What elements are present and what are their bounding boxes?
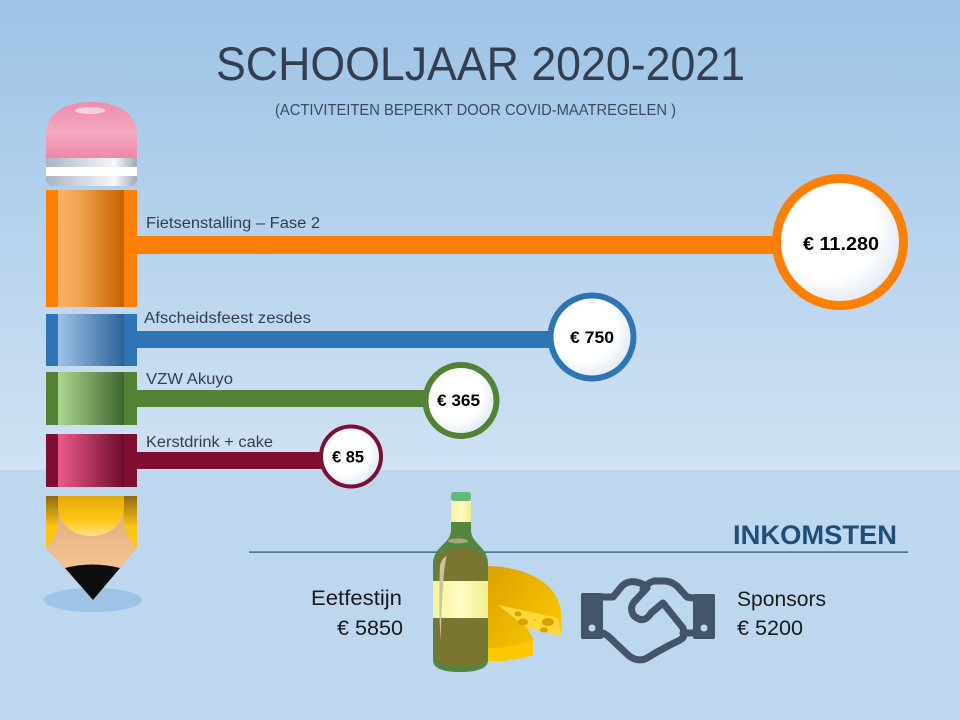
maroon bar: Kerstdrink xyxy=(137,426,381,486)
income divider xyxy=(249,552,908,553)
orange bar: Fietsenstalling xyxy=(137,178,904,306)
green segment xyxy=(46,372,137,425)
icon: handshake xyxy=(581,581,715,660)
blue bar: Afscheidsfeest: € 750 xyxy=(570,329,614,347)
blue bar: Afscheidsfeest xyxy=(137,296,634,378)
hands xyxy=(603,581,693,660)
left cuff xyxy=(581,593,603,639)
orange bar: Fietsenstalling: Fietsenstalling – Fase 2 xyxy=(146,215,320,232)
pencil tip xyxy=(46,496,137,600)
eraser xyxy=(46,102,137,158)
income: Eetfestijn xyxy=(311,587,403,640)
pencil xyxy=(44,102,142,612)
green bar: VZW Akuyo xyxy=(137,365,496,436)
icon: cheese xyxy=(486,566,562,661)
income heading: INKOMSTEN xyxy=(733,520,897,550)
maroon bar: Kerstdrink: € 85 xyxy=(332,448,364,466)
income: Sponsors: € 5200 xyxy=(737,617,803,640)
income: Sponsors: Sponsors xyxy=(737,588,826,611)
ferrule xyxy=(46,158,137,186)
subtitle: (ACTIVITEITEN BEPERKT DOOR COVID-MAATREGELEN ) xyxy=(275,102,676,119)
orange segment xyxy=(46,190,137,307)
maroon segment xyxy=(46,434,137,487)
income: Sponsors xyxy=(737,588,826,640)
blue segment xyxy=(46,314,137,366)
orange bar: Fietsenstalling: € 11.280 xyxy=(803,233,879,254)
green bar: VZW Akuyo: VZW Akuyo xyxy=(146,371,233,388)
pencil shadow xyxy=(44,588,142,612)
right cuff xyxy=(693,594,715,639)
title: SCHOOLJAAR 2020-2021 xyxy=(216,37,745,90)
green bar: VZW Akuyo: € 365 xyxy=(437,392,480,410)
icon: wine bottle xyxy=(433,492,488,672)
income: Eetfestijn: Eetfestijn xyxy=(311,587,402,610)
income: Eetfestijn: € 5850 xyxy=(337,617,403,640)
blue bar: Afscheidsfeest: Afscheidsfeest zesdes xyxy=(144,310,311,327)
maroon bar: Kerstdrink: Kerstdrink + cake xyxy=(146,434,273,451)
